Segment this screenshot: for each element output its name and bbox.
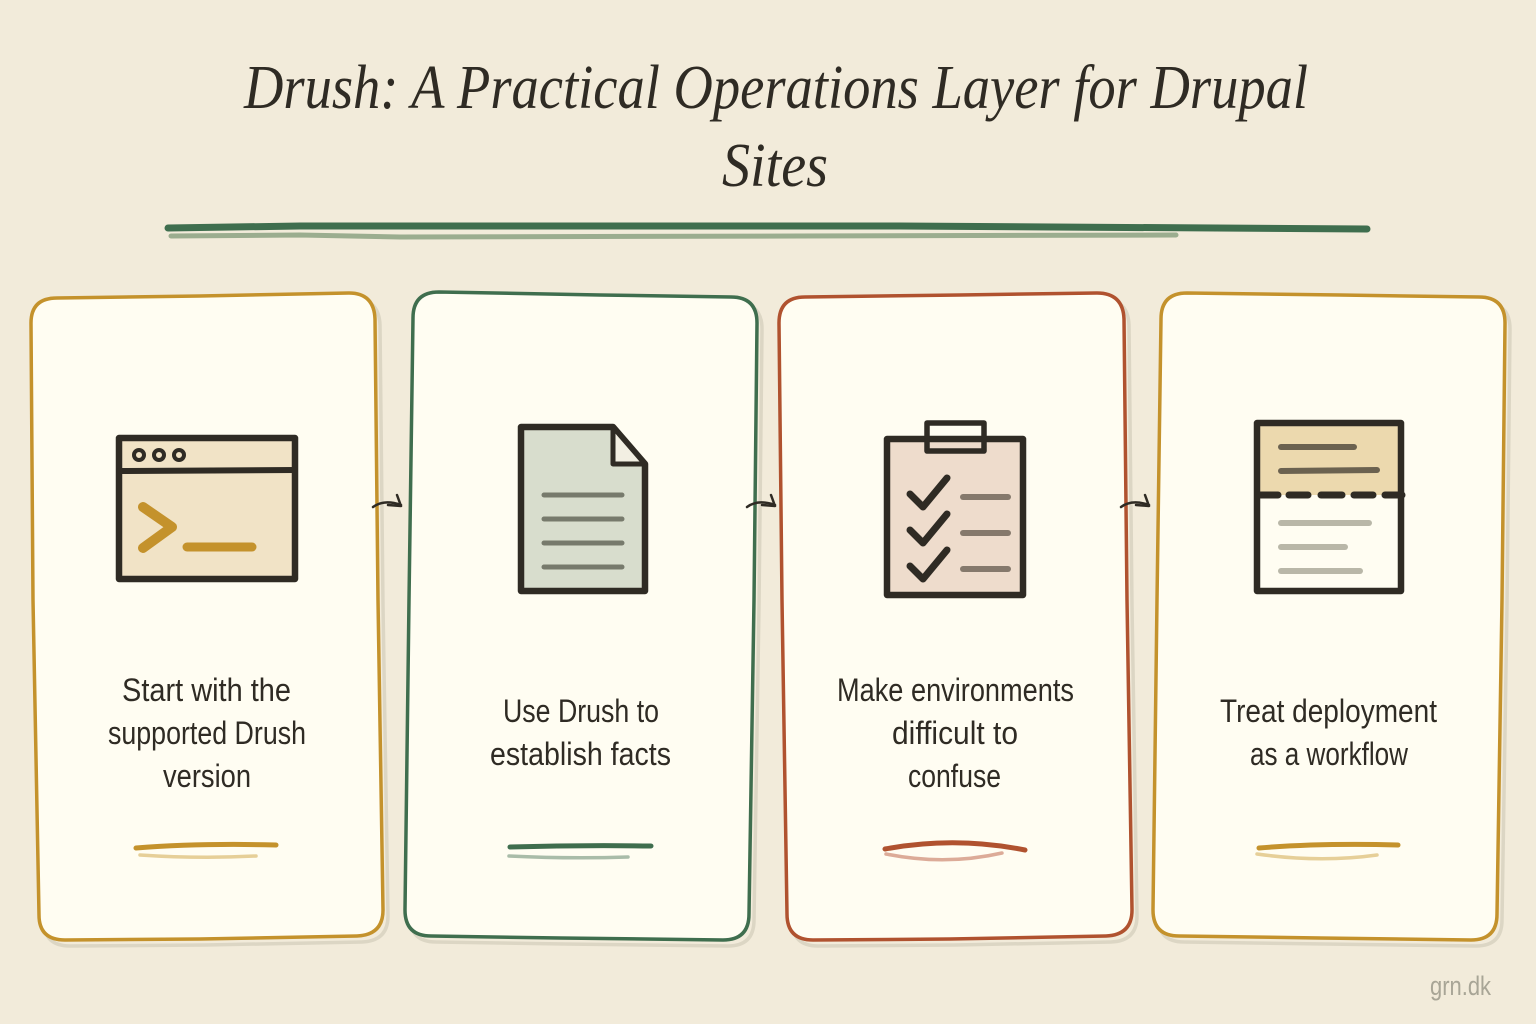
text: step 4: Treat deployment [1220, 693, 1437, 729]
arrow: step 2 to 3 [747, 495, 775, 507]
watermark: grn.dk [1430, 971, 1491, 1001]
text: step 4: as a workflow [1250, 736, 1409, 772]
panel: start with supported version [31, 293, 388, 946]
accent underline 4 [1257, 844, 1398, 859]
icon: split document [1257, 423, 1402, 591]
arrow: step 3 to 4 [1121, 495, 1149, 507]
text: step 1: Start with the [122, 672, 291, 708]
text: step 3: Make environments [837, 672, 1074, 708]
text: step 2 [490, 693, 671, 772]
title: Drush: A Practical Operations Layer for Drupal [243, 54, 1308, 122]
accent underline 1 [136, 844, 276, 857]
accent underline 3 [885, 843, 1025, 860]
text: step 1 [108, 672, 306, 794]
panel: difficult to confuse [779, 293, 1137, 946]
text: step 1: version [163, 758, 251, 794]
title [243, 54, 1308, 200]
title: Sites [722, 132, 828, 200]
icon: document [521, 427, 645, 591]
text: step 3: difficult to [892, 715, 1018, 751]
icon: terminal window [119, 438, 295, 579]
accent underline 2 [509, 846, 651, 858]
text: step 2: Use Drush to [503, 693, 659, 729]
text: step 3: confuse [908, 758, 1001, 794]
text: step 2: establish facts [490, 736, 671, 772]
panel: deployment workflow [1153, 293, 1510, 946]
text: step 3 [837, 672, 1074, 794]
title underline [168, 226, 1367, 237]
text: step 1: supported Drush [108, 715, 306, 751]
arrow: step 1 to 2 [373, 495, 401, 507]
icon: clipboard checklist [887, 423, 1023, 595]
text: step 4 [1220, 693, 1437, 772]
panel: establish facts [405, 292, 762, 946]
